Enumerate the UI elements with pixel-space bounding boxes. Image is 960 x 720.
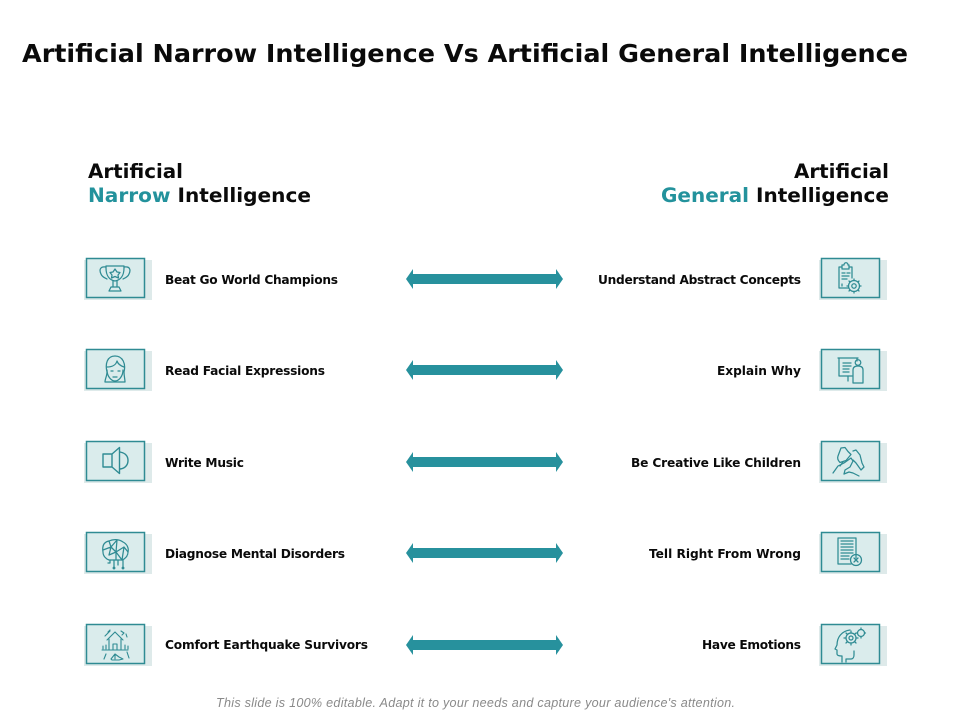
row 4 right: tell right from wrong [649,532,887,574]
heading: narrow intelligence: Narrow Intelligence [88,184,311,207]
row 5 arrow [406,635,563,655]
row 4 left: diagnose mental disorders [84,532,345,574]
row 5 right: have emotions: Have Emotions [702,638,801,652]
icon: head with gears [835,628,866,662]
row 2 left: read facial expressions: Read Facial Expressions [165,364,325,378]
row 1 arrow [406,269,563,289]
heading: narrow intelligence [88,160,311,207]
heading: general intelligence: Artificial [794,160,889,183]
heading: narrow intelligence: Artificial [88,160,183,183]
row 3 right: be creative like children: Be Creative Like Children [631,456,801,470]
row 5 left: comfort earthquake survivors [84,624,368,666]
icon: face [105,356,125,382]
row 5 right: have emotions [702,624,887,666]
row 4 right: tell right from wrong: Tell Right From Wrong [649,547,801,561]
icon: network brain [103,540,128,569]
row 1 left: beat go world champions [84,258,338,300]
icon: hands [833,448,864,476]
icon: damaged house [102,630,129,660]
icon: presenter at board [838,358,863,383]
row 1 right: understand abstract concepts [598,258,887,300]
row 1 right: understand abstract concepts: Understand Abstract Concepts [598,273,801,287]
row 2 arrow [406,360,563,380]
row 1 left: beat go world champions: Beat Go World Champions [165,273,338,287]
row 3 left: write music: Write Music [165,456,244,470]
row 5 left: comfort earthquake survivors: Comfort Earthquake Survivors [165,638,368,652]
row 4 left: diagnose mental disorders: Diagnose Mental Disorders [165,547,345,561]
icon: clipboard with gear [839,263,861,293]
row 3 left: write music [84,442,244,483]
row 3 arrow [406,452,563,472]
row 2 right: explain why [717,350,887,391]
icon: speaker [103,448,128,474]
footer note: This slide is 100% editable. Adapt it to your needs and capture your audience's attention. [216,696,735,710]
title: Artificial Narrow Intelligence Vs Artificial General Intelligence [22,39,908,68]
heading: general intelligence: General Intelligence [661,184,889,207]
row 2 right: explain why: Explain Why [717,364,801,378]
icon: trophy [100,266,130,291]
row 3 right: be creative like children [631,442,887,483]
row 4 arrow [406,543,563,563]
heading: general intelligence [661,160,889,207]
icon: document with cross badge [838,538,862,566]
row 2 left: read facial expressions [84,350,325,391]
